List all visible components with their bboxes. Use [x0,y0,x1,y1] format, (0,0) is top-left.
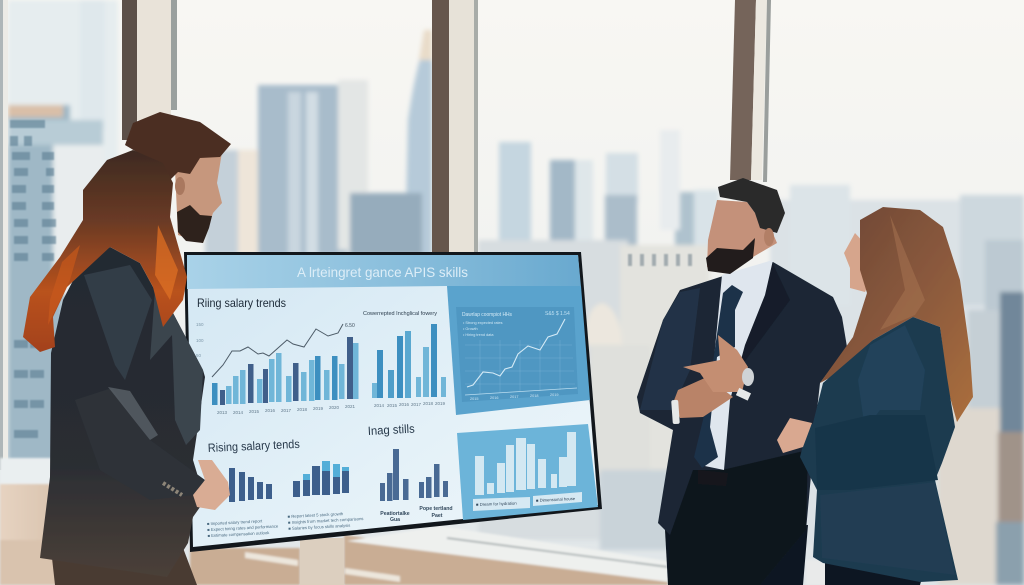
chart: blue vertical bars: 2015 [387,403,398,408]
panel: dashboard screen [184,252,602,552]
panel: light bars on blue [457,424,598,520]
legend chips [473,497,530,511]
man's hair [718,178,785,233]
heading band [187,255,581,289]
icon: man's beard [177,205,212,243]
chart: salary trends bars and line: 50 [196,353,202,358]
man's lower hand [673,377,733,418]
woman's jacket [800,317,958,582]
chart: salary trends bars and line: 150 [196,322,204,327]
chart: salary trends bars and line: 2017 [281,408,292,413]
chart: blue vertical bars [363,311,446,408]
panel: blue line chart: Dawrlap coompiot HHs [462,312,512,318]
man's jacket [637,262,847,585]
chart: blue vertical bars: 2019 [435,401,446,406]
woman's hair [23,150,187,352]
man's upper hand [683,335,748,392]
chart: salary trends bars and line: 2021 [345,404,356,409]
person: man in navy suit [637,178,847,585]
woman's face [844,233,880,292]
panel: blue line chart: 2017 [510,395,518,399]
chart: rising salary bars [207,437,364,538]
man's shirt [700,260,773,470]
chart: rising salary bars: ■ Insights from market tech comparisons [288,516,364,525]
panel: light bars on blue: ■ Dimensional house [536,496,576,503]
panel: blue line chart: 2018 [530,394,538,398]
panel: blue line chart: 2016 [490,396,498,400]
panel: blue line chart [447,286,590,415]
man's belt [698,470,728,486]
chart: rising salary bars: ■ Expect hiring rates and performance [207,523,279,532]
heading: rising salary: Rising salary tends [208,437,300,455]
panel: blue line chart: S&5 $ 1.54 [545,311,570,317]
screen background [187,255,598,547]
panel: blue line chart: • Growth [463,327,478,331]
person: bearded man, left [125,112,231,243]
woman's trousers [52,540,197,585]
window frames [0,0,771,470]
chart: rising salary bars: ■ Report latest 5 stock growth [287,511,344,519]
icon: man's hair [125,112,231,180]
chart: rising salary bars: ■ Estimate compensation outlook [207,530,270,538]
woman's hand [193,460,230,510]
chart: skills dark bars: Pope tertland [419,506,453,512]
chart: rising salary bars: ■ Imported salary trend report [207,518,263,526]
icon: man's face [175,150,222,243]
panel: light bars on blue: ■ Dream for hydration [476,501,517,507]
chart: skills dark bars [367,422,453,523]
chart: salary trends bars and line: 2013 [217,410,228,415]
icon: wrist watch [742,368,754,386]
panel: blue line chart: 2015 [470,397,478,401]
person: woman with long hair, left [23,150,230,585]
chart: skills dark bars: Gua [390,517,400,523]
screen bezel [184,252,602,552]
woman's jacket [40,247,205,577]
chart: blue vertical bars: 2017 [411,402,422,407]
chart: rising salary bars: ■ Salaries by focus skills analysis [288,523,350,531]
chart: salary trends bars and line [196,296,358,415]
man's trousers [665,525,808,585]
chart: salary trends bars and line: 2020 [329,405,340,410]
man's beard [706,238,755,274]
man's tie [694,285,743,468]
woman's hair [820,207,973,422]
chart: blue vertical bars: 2018 [423,401,434,406]
chart: salary trends bars and line: 2018 [297,407,308,412]
man's face [707,200,777,273]
title: A lrteingret gance APIS skills [297,264,468,280]
chart: blue vertical bars: 2016 [399,402,410,407]
panel: blue line chart: • Hiring trend data [463,333,494,337]
chart: skills dark bars: Paet [432,513,443,519]
chart: salary trends bars and line: 100 [196,338,204,343]
panel: blue line chart: • Strong expected rates [463,321,503,325]
chart: blue vertical bars: 2014 [374,403,385,408]
person: woman in teal jacket [777,207,973,585]
chart: skills dark bars: Peatiortalke [380,511,410,517]
panel: blue line chart: 2019 [550,393,558,397]
window sill and wall [0,458,830,585]
woman's trousers [825,562,922,585]
chart: salary trends bars and line: 2016 [265,408,276,413]
heading: skills: Inag stills [367,422,415,438]
chart: salary trends bars and line: 2015 [249,409,260,414]
woman's hand [777,418,812,453]
heading: salary trends: Riing salary trends [197,296,286,310]
chart: salary trends bars and line: 6.50 [345,323,355,329]
chart: salary trends bars and line: 2014 [233,410,244,415]
screen stand [300,538,344,585]
chart title: Cowerrepted Inchglical fowery [363,311,437,317]
chart: salary trends bars and line: 2019 [313,406,324,411]
